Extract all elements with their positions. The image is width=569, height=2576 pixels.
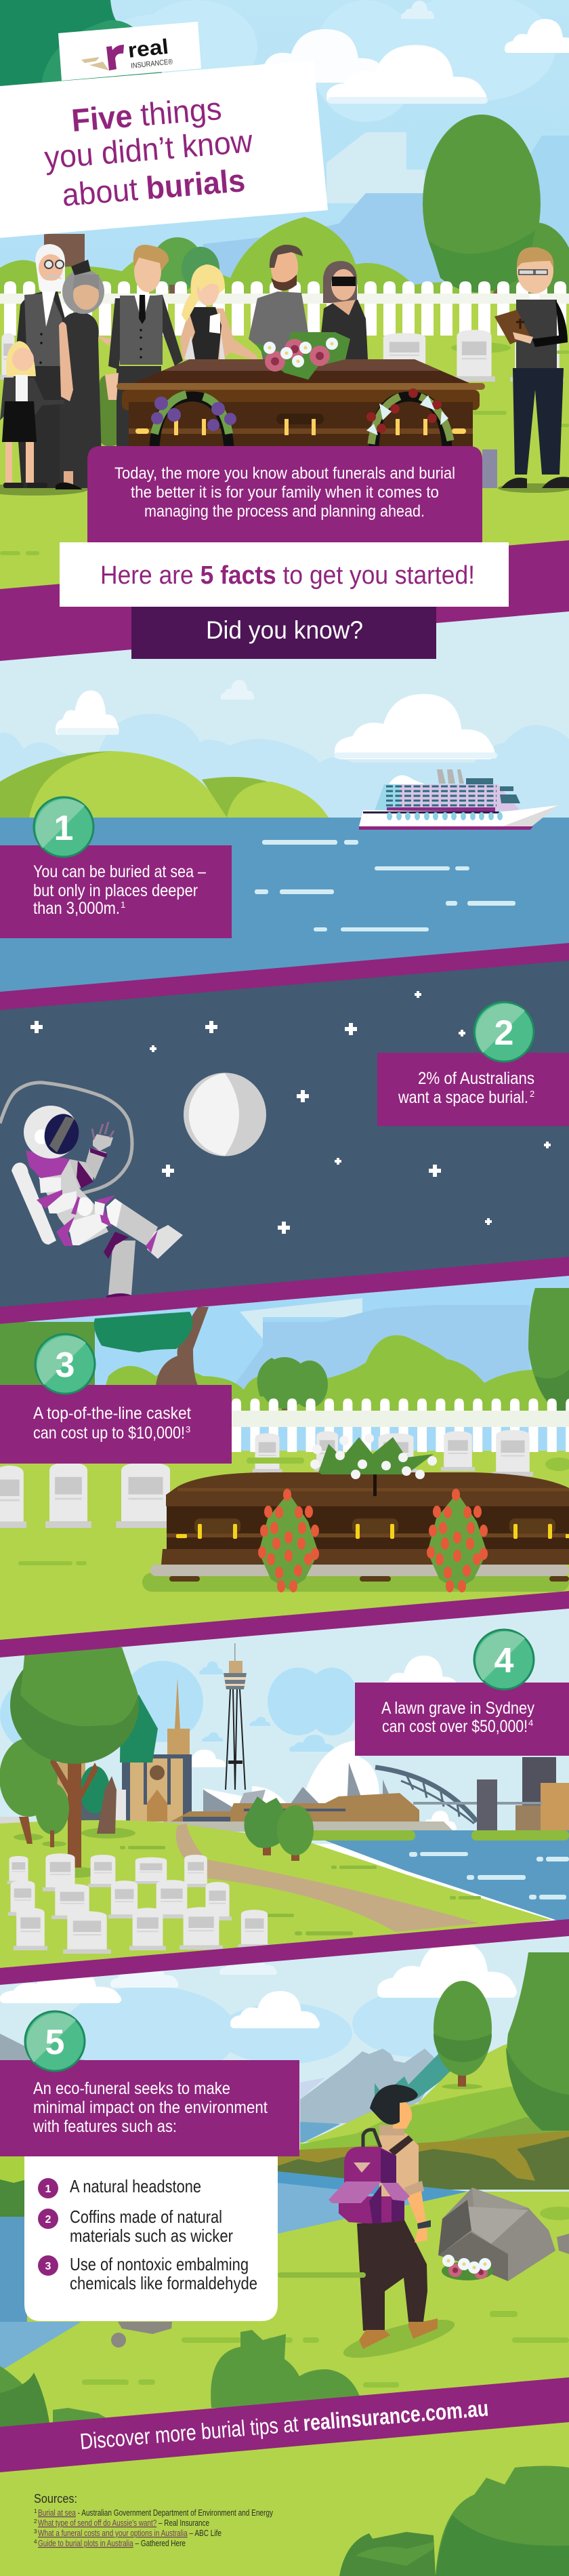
clouds: eco scene bbox=[0, 1941, 517, 2028]
background: Sydney sky bbox=[0, 1609, 569, 1844]
sea bbox=[0, 818, 569, 1011]
bushes by the harbour bbox=[244, 1796, 314, 1861]
panel: fact 1: You can be buried at sea – bbox=[33, 862, 206, 881]
person: grandfather bbox=[14, 244, 65, 488]
panel: fact 2: 2% of Australians bbox=[418, 1069, 534, 1088]
person: young girl bbox=[0, 341, 64, 488]
title card: about burials bbox=[60, 162, 247, 213]
casket with flowers and wreaths bbox=[117, 332, 485, 449]
scene: pale clouds behind the sea bbox=[0, 714, 569, 818]
fence bbox=[232, 1398, 569, 1452]
badge: 4 bbox=[474, 1630, 534, 1689]
item 2 bbox=[38, 2207, 233, 2246]
source 1: 1 bbox=[34, 2508, 37, 2514]
white clouds bbox=[249, 1, 569, 104]
person: blonde woman bbox=[180, 264, 257, 361]
grass dashes bbox=[14, 1828, 481, 1935]
Opera House bbox=[163, 1740, 454, 1832]
bushes: lower meadow bbox=[0, 2330, 363, 2434]
Harbour Bridge bbox=[375, 1767, 542, 1830]
panel: fact 4: A lawn grave in Sydney bbox=[381, 1699, 534, 1718]
person: woman in sunglasses bbox=[318, 261, 368, 359]
panel: fact 3: A top-of-the-line casket bbox=[33, 1404, 191, 1423]
badge: 2 bbox=[474, 1002, 534, 1062]
city silhouette behind the cemetery bbox=[203, 132, 569, 291]
source 2: What type of send off do Aussie's want? – Real Insurance bbox=[38, 2518, 209, 2528]
wreath: purple bbox=[151, 395, 236, 447]
item 1 bbox=[38, 2176, 201, 2198]
trees: right side of cemetery bbox=[423, 115, 569, 347]
item 2: materials such as wicker bbox=[70, 2226, 233, 2246]
hedge bbox=[0, 217, 569, 298]
item 2: 2 bbox=[45, 2214, 51, 2226]
person: grandmother bbox=[56, 260, 112, 489]
panel: fact 4 bbox=[355, 1683, 569, 1756]
badge: 3: 3 bbox=[56, 1346, 75, 1385]
grass marks bbox=[18, 1457, 569, 1565]
rock and flowers bbox=[438, 2188, 555, 2281]
panel: fact 1 bbox=[0, 845, 232, 938]
moon bbox=[184, 1072, 266, 1156]
pale background clouds bbox=[88, 0, 555, 122]
panel: fact 2: 2 bbox=[530, 1089, 534, 1099]
source 2: 2 bbox=[34, 2518, 37, 2524]
banner: purple divider bbox=[0, 540, 569, 661]
Sydney Tower bbox=[224, 1643, 247, 1790]
background: eco-funeral sky bbox=[0, 1936, 569, 2210]
person: man in dark suit bbox=[105, 245, 183, 446]
trees: behind fact 3 bbox=[0, 1307, 209, 1385]
card: eco-funeral features list bbox=[24, 2156, 278, 2321]
logo wordmark bbox=[127, 34, 173, 71]
panel: fact 5: minimal impact on the environment bbox=[33, 2098, 268, 2117]
source 4: Guide to burial plots in Australia – Gathered Here bbox=[38, 2538, 186, 2548]
person: bearded man bbox=[249, 245, 312, 359]
gravestones bbox=[0, 1430, 533, 1528]
badge: 2: 2 bbox=[494, 1013, 513, 1053]
background: section one sky bbox=[0, 603, 569, 820]
item 1: A natural headstone bbox=[70, 2176, 201, 2196]
pale clouds: Sydney bbox=[0, 1655, 459, 1830]
panel: fact 2: want a space burial. bbox=[398, 1088, 528, 1107]
item 3: 3 bbox=[45, 2261, 51, 2272]
cruise ship bbox=[359, 769, 558, 830]
banner: five facts bbox=[60, 542, 509, 607]
panel: fact 2 bbox=[377, 1053, 569, 1126]
item 3 bbox=[38, 2254, 257, 2293]
source 3: What a funeral costs and your options in Australia – ABC Life bbox=[38, 2528, 222, 2538]
banner: did you know: Did you know? bbox=[206, 616, 363, 644]
banner: call to action: Discover more burial tips at realinsurance.com.au bbox=[79, 2396, 490, 2454]
spray: white flowers bbox=[310, 1434, 437, 1479]
background: cemetery sky bbox=[0, 1276, 569, 1647]
closing meadow bbox=[0, 2419, 569, 2576]
logo wordmark: INSURANCE® bbox=[131, 58, 173, 71]
path bbox=[176, 1824, 479, 1932]
grass dashes bbox=[82, 2207, 569, 2497]
panel: fact 3 bbox=[0, 1385, 232, 1464]
panel: fact 3: 3 bbox=[186, 1424, 190, 1434]
mountains bbox=[0, 2034, 456, 2144]
bench post bbox=[482, 449, 497, 488]
spray: red flowers right bbox=[427, 1489, 488, 1592]
cemetery buildings bbox=[224, 1305, 530, 1400]
grass: Sydney foreground bbox=[0, 1820, 551, 1969]
gravestones: Sydney bbox=[7, 1853, 270, 1954]
hills: eco scene bbox=[0, 2027, 569, 2447]
badge: 1 bbox=[34, 797, 93, 857]
cemetery city silhouette bbox=[240, 1298, 362, 1339]
rocks bbox=[111, 2234, 569, 2348]
hills bbox=[0, 751, 329, 818]
title card bbox=[0, 60, 328, 238]
panel: fact 4: 4 bbox=[528, 1718, 533, 1728]
background: space bbox=[0, 956, 569, 1315]
grass bbox=[0, 302, 569, 605]
badge: 5 bbox=[25, 2011, 85, 2071]
panel: fact 1: 1 bbox=[121, 900, 125, 910]
sources bbox=[34, 2492, 273, 2548]
logo mark bbox=[81, 45, 124, 71]
sources: Sources: bbox=[34, 2492, 77, 2505]
logo card bbox=[58, 22, 201, 81]
sea dashes bbox=[255, 840, 515, 931]
stars bbox=[30, 991, 551, 1234]
tree: top-left canopy bbox=[0, 0, 163, 281]
bushes: bottom right bbox=[339, 2466, 569, 2576]
St Mary's Cathedral bbox=[122, 1678, 192, 1822]
source 1: Burial at sea - Australian Government Department of Environment and Energy bbox=[38, 2508, 273, 2518]
panel: fact 5: An eco-funeral seeks to make bbox=[33, 2079, 230, 2098]
logo wordmark: real bbox=[127, 35, 169, 62]
hedge bbox=[95, 1335, 569, 1424]
panel: fact 1: than 3,000m. bbox=[33, 899, 120, 918]
badge: 1: 1 bbox=[54, 809, 73, 848]
ground shadows bbox=[0, 483, 569, 496]
tree: small bbox=[434, 1981, 492, 2089]
panel: fact 3: can cost up to $10,000! bbox=[33, 1424, 185, 1443]
source 4: 4 bbox=[34, 2539, 37, 2545]
astronaut bbox=[0, 1083, 183, 1298]
panel: intro text: the better it is for your family when it comes to bbox=[131, 483, 439, 502]
item 3: chemicals like formaldehyde bbox=[70, 2273, 257, 2293]
panel: fact 5 bbox=[0, 2060, 299, 2156]
bushes behind the fence bbox=[257, 1357, 328, 1410]
banner: did you know bbox=[131, 607, 436, 659]
badge: 3 bbox=[35, 1334, 95, 1394]
water dashes bbox=[409, 1852, 569, 1899]
badge: 4: 4 bbox=[494, 1641, 514, 1681]
panel: fact 4: can cost over $50,000! bbox=[382, 1717, 528, 1736]
tree: right canopy bbox=[528, 1288, 569, 1420]
title card: Five things bbox=[70, 90, 223, 138]
pale clouds: eco scene bbox=[61, 1986, 488, 2081]
casket spray bbox=[254, 332, 350, 380]
tree: large right bbox=[506, 1952, 569, 2131]
riverbank strips bbox=[308, 1830, 569, 1840]
hiker bbox=[329, 2085, 458, 2365]
item 3: Use of nontoxic embalming bbox=[70, 2254, 249, 2274]
dividers: purple bands bbox=[0, 943, 569, 1985]
person: priest with book bbox=[494, 247, 569, 488]
panel: fact 5: with features such as: bbox=[33, 2117, 177, 2136]
wreath: red and white bbox=[366, 388, 450, 447]
panel: intro text bbox=[87, 446, 482, 542]
panel: fact 1: but only in places deeper bbox=[33, 881, 198, 900]
background: opening scene sky bbox=[0, 0, 569, 610]
casket handles bbox=[135, 419, 466, 435]
panel: intro text: Today, the more you know about funerals and burial bbox=[114, 464, 455, 483]
source 3: 3 bbox=[34, 2529, 37, 2535]
item 1: 1 bbox=[45, 2183, 51, 2195]
fence bbox=[0, 281, 569, 336]
ground shadow behind stones bbox=[451, 342, 511, 353]
banner: call to action bbox=[0, 2377, 569, 2472]
bushes behind the fence bbox=[152, 237, 219, 298]
gravestones bbox=[0, 330, 564, 382]
spray: red flowers left bbox=[258, 1489, 319, 1592]
clouds: sea scene bbox=[56, 680, 497, 759]
ground marks bbox=[0, 350, 569, 555]
trees: Sydney foreground bbox=[0, 1646, 158, 1868]
title card: you didn’t know bbox=[43, 123, 255, 176]
cemetery grass bbox=[0, 1451, 569, 1644]
badge: 5: 5 bbox=[45, 2023, 64, 2062]
water: harbour bbox=[298, 1830, 569, 1925]
panel: intro text: managing the process and planning ahead. bbox=[144, 502, 425, 521]
casket: fact 3 bbox=[142, 1434, 569, 1592]
background buildings bbox=[0, 1757, 569, 1847]
banner: five facts: Here are 5 facts to get you started! bbox=[100, 561, 475, 590]
item 2: Coffins made of natural bbox=[70, 2207, 222, 2227]
